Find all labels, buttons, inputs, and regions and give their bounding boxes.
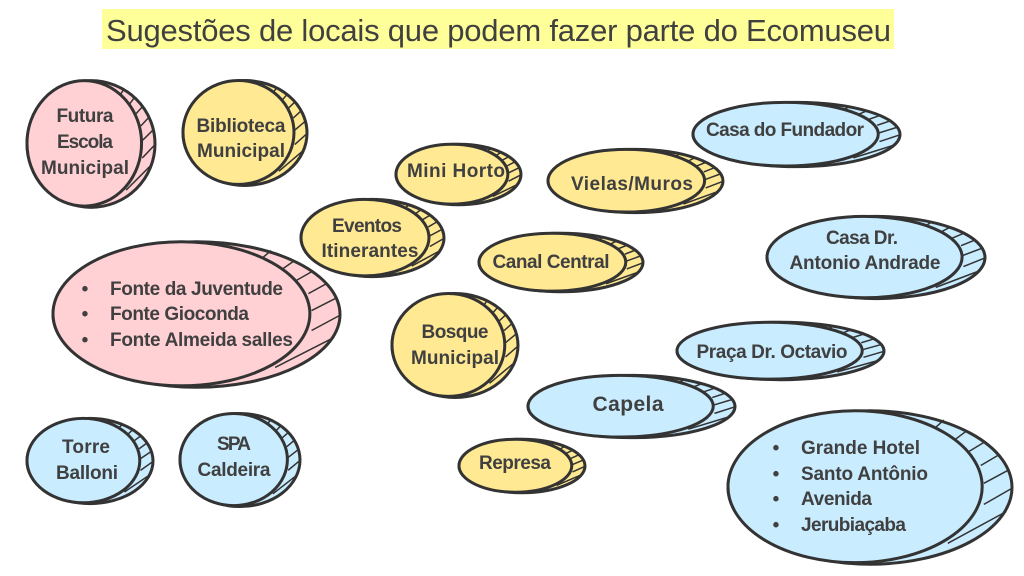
bubble: Mini Horto: Mini Horto — [407, 161, 505, 182]
bubble: Futura Escola Municipal: Municipal — [41, 158, 129, 179]
bubble: Represa: Represa — [479, 453, 551, 474]
bubble: Bosque Municipal: Bosque — [422, 322, 488, 343]
bubble: Fontes (lista): • — [82, 279, 89, 300]
bubble: Hotéis (lista): • — [773, 489, 780, 510]
bubble: Bosque Municipal — [392, 294, 518, 397]
bubble: Biblioteca Municipal: Municipal — [197, 141, 285, 162]
bubble: Torre Balloni — [27, 418, 153, 504]
bubble: SPA Caldeira: Caldeira — [198, 460, 271, 481]
bubble: Futura Escola Municipal: Escola — [57, 132, 113, 153]
bubble: Hotéis (lista): • — [773, 515, 780, 536]
bubble: Eventos Itinerantes: Eventos — [332, 216, 402, 237]
bubble: Biblioteca Municipal: Biblioteca — [196, 116, 286, 137]
bubble: Futura Escola Municipal — [27, 81, 155, 207]
bubble: Canal Central: Canal Central — [492, 252, 610, 273]
bubble: Fontes (lista): • — [82, 330, 89, 351]
bubble: Casa do Fundador — [693, 102, 900, 167]
bubble: Torre Balloni: Torre — [62, 437, 110, 458]
bubble: Fontes (lista): Fonte da Juventude — [110, 279, 283, 300]
bubble: Casa do Fundador: Casa do Fundador — [706, 120, 865, 141]
bubble: Represa — [459, 439, 585, 493]
bubble: Hotéis (lista): • — [773, 438, 780, 459]
bubble: Casa Dr. Antonio Andrade: Casa Dr. — [826, 228, 898, 249]
bubble: Canal Central — [479, 233, 643, 292]
bubble: Hotéis (lista): Grande Hotel — [801, 438, 920, 459]
bubble: Fontes (lista) — [53, 242, 340, 387]
bubble: Fontes (lista): • — [82, 304, 89, 325]
bubble: Capela — [528, 375, 735, 438]
bubble: Eventos Itinerantes: Itinerantes — [322, 241, 418, 262]
bubble: Bosque Municipal: Municipal — [411, 348, 499, 369]
bubble: Vielas/Muros: Vielas/Muros — [571, 174, 693, 195]
bubble: Hotéis (lista) — [728, 411, 1012, 564]
bubble: Fontes (lista): Fonte Almeida salles — [110, 330, 293, 351]
bubble: Hotéis (lista): Jerubiaçaba — [801, 515, 906, 536]
bubble: Eventos Itinerantes — [301, 199, 444, 277]
bubble: Hotéis (lista): Santo Antônio — [801, 464, 928, 485]
bubble: Praça Dr. Octavio: Praça Dr. Octavio — [696, 342, 848, 363]
bubble: Torre Balloni: Balloni — [56, 463, 118, 484]
title: Sugestões de locais que podem fazer parte do Ecomuseu — [106, 13, 891, 48]
bubble: Casa Dr. Antonio Andrade: Antonio Andrade — [790, 253, 940, 274]
bubble: Fontes (lista): Fonte Gioconda — [110, 304, 249, 325]
bubble: Mini Horto — [396, 144, 521, 205]
bubble: SPA Caldeira — [180, 413, 300, 507]
bubble: Vielas/Muros — [548, 149, 723, 213]
bubble: Futura Escola Municipal: Futura — [56, 106, 114, 127]
bubble: SPA Caldeira: SPA — [217, 434, 251, 455]
bubble: Hotéis (lista): • — [773, 464, 780, 485]
bubble: Capela: Capela — [592, 393, 664, 416]
bubble: Casa Dr. Antonio Andrade — [767, 216, 985, 299]
bubble: Hotéis (lista): Avenida — [801, 489, 872, 510]
bubble: Praça Dr. Octavio — [677, 322, 884, 380]
bubble: Biblioteca Municipal — [183, 81, 307, 185]
